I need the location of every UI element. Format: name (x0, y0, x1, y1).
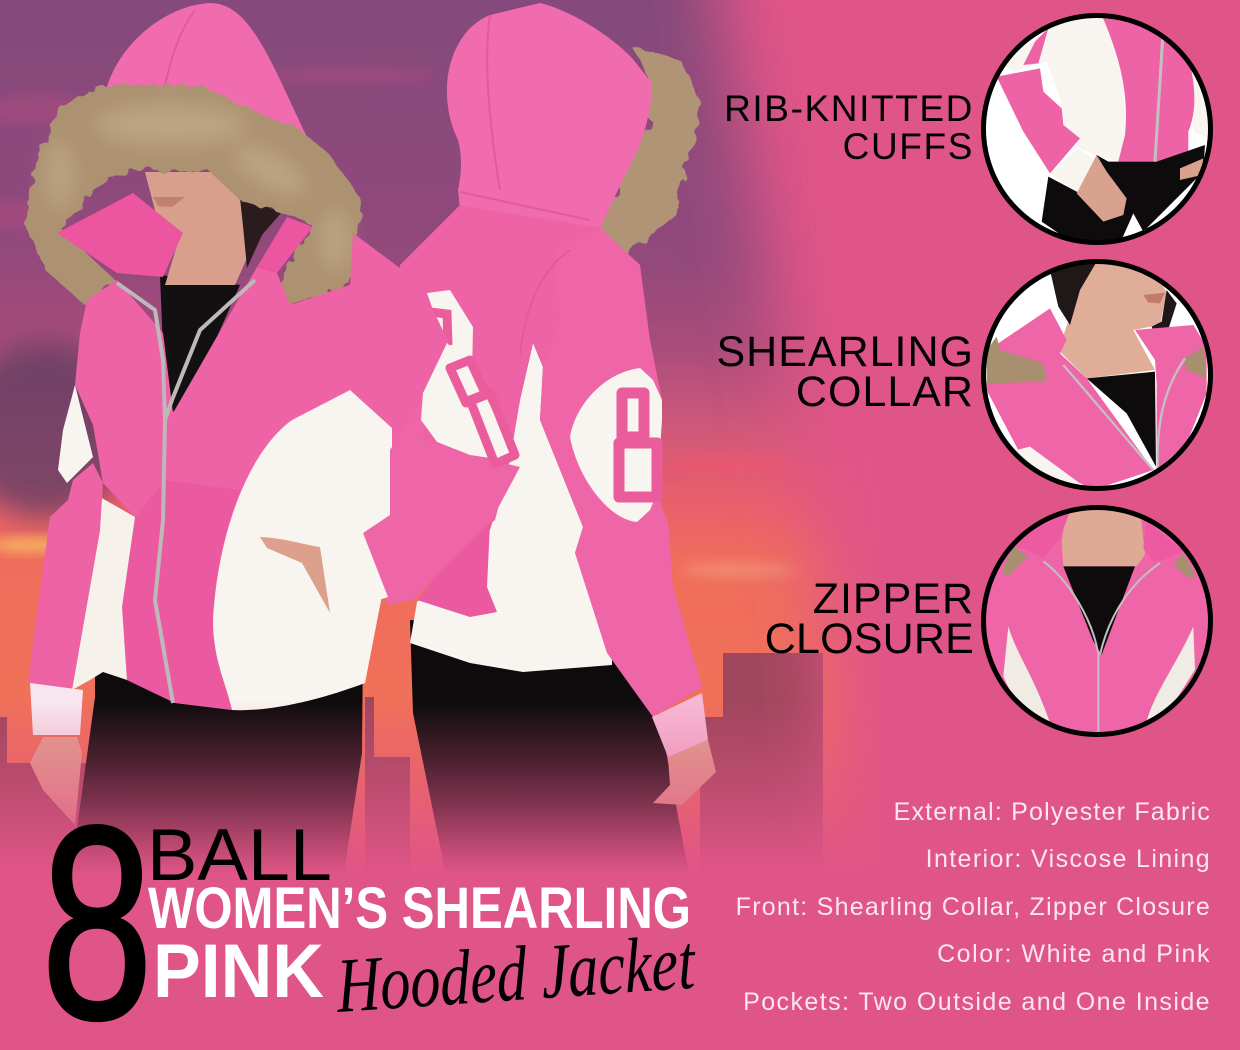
BALL: BALL (147, 815, 332, 896)
spec: interior: Interior: Viscose Lining (926, 845, 1211, 873)
back view jacket (395, 3, 716, 880)
script subtitle: Hooded Jacket (334, 919, 698, 1030)
back hand (653, 740, 716, 805)
back lower pink panel (417, 523, 497, 617)
back shoulder white figure piece (427, 290, 473, 375)
women's shearling: WOMEN’S SHEARLING (148, 876, 691, 941)
solid lower panel (0, 874, 1240, 1050)
back hood (447, 3, 651, 228)
front body pink (75, 233, 450, 710)
black top (160, 275, 240, 420)
left hand (30, 737, 82, 825)
front view jacket (25, 3, 520, 880)
spec: front: Front: Shearling Collar, Zipper Closure (736, 893, 1211, 921)
label: rib-knitted cuffs: CUFFS (843, 126, 974, 167)
hand in pocket (260, 537, 330, 613)
spec: color: Color: White and Pink (937, 940, 1211, 968)
zipper (117, 280, 255, 703)
left side white (72, 497, 135, 690)
back sleeve circle (570, 368, 662, 522)
title (41, 769, 698, 1050)
PINK: PINK (153, 929, 324, 1014)
label: shearling collar: COLLAR (796, 368, 974, 416)
label: zipper closure (765, 575, 974, 663)
lower fade into background (0, 700, 880, 875)
back upper figure stroke (430, 312, 448, 345)
front right sleeve (363, 395, 520, 605)
circle: shearling collar (980, 250, 1220, 495)
fur trim (25, 85, 362, 305)
label: zipper closure: CLOSURE (765, 615, 974, 663)
back seam (460, 15, 590, 355)
back legs (410, 620, 690, 880)
front collar left (57, 193, 183, 277)
lips (153, 197, 185, 207)
central darker pink (122, 480, 240, 710)
specification list (736, 798, 1211, 1016)
back white side panel and hem (410, 343, 612, 672)
label: shearling collar (716, 328, 974, 416)
label: shearling collar: SHEARLING (716, 328, 974, 376)
sky background (0, 0, 900, 875)
back fur trim (598, 47, 700, 255)
label: rib-knitted cuffs: RIB-KNITTED (724, 88, 974, 129)
solid right panel (880, 0, 1240, 1050)
hood seam (165, 10, 195, 85)
pink fade to right (700, 0, 1240, 900)
front hood (106, 3, 306, 135)
front legs (70, 640, 363, 880)
back sleeve figure 8 (619, 393, 657, 497)
left white shoulder stripe (58, 385, 93, 483)
city silhouette (0, 653, 823, 878)
sleeve white 8 patch (421, 343, 517, 462)
back sleeve (540, 228, 702, 717)
front white panel (213, 390, 392, 710)
label: rib-knitted cuffs (724, 88, 974, 167)
left sleeve (28, 463, 103, 690)
label: zipper closure: ZIPPER (813, 575, 974, 623)
back cuff (652, 693, 708, 757)
circle: zipper closure (980, 498, 1220, 743)
hair (240, 198, 282, 268)
front collar right (257, 217, 313, 273)
fur highlights (48, 105, 349, 270)
back upper panel pink (395, 205, 650, 560)
spec: external: External: Polyester Fabric (894, 798, 1211, 826)
left cuff (30, 683, 83, 735)
sleeve figure 8 (450, 360, 515, 464)
sleeve cuff (320, 533, 388, 617)
spec: pockets: Pockets: Two Outside and One Inside (743, 988, 1211, 1016)
neck and chin (145, 172, 255, 285)
circle: rib-knitted cuffs (980, 5, 1220, 250)
